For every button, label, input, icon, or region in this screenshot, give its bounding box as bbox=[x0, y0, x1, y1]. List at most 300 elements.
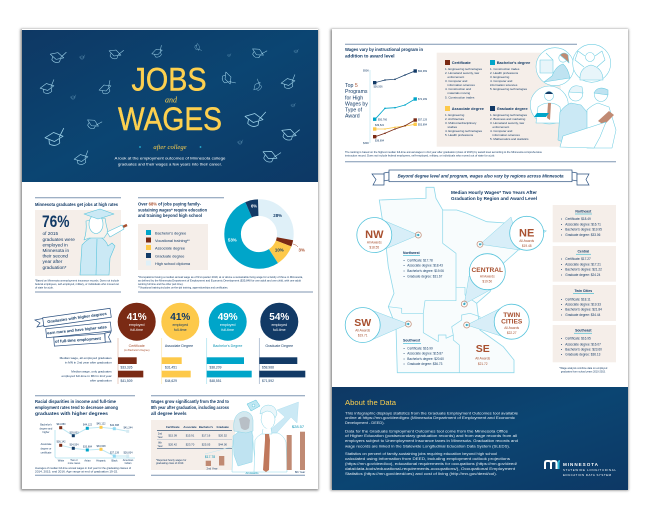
footnote: working full time and the other part time). bbox=[138, 283, 184, 286]
paragraph 1: This infographic displays statistics from the Graduate Employment Outcomes tool available bbox=[345, 410, 518, 415]
list: northwest bbox=[403, 251, 444, 278]
list: northwest: Northwest bbox=[403, 251, 420, 255]
circle stats: employed bbox=[173, 323, 188, 327]
legend: High school diploma bbox=[155, 261, 191, 266]
line chart: Associate bbox=[41, 443, 52, 446]
region: southwest: $19.71 bbox=[358, 334, 368, 338]
panel: central values: Central bbox=[577, 250, 589, 254]
line chart: more races bbox=[68, 462, 81, 465]
decorative graduation caps bbox=[39, 43, 300, 166]
region: central bbox=[461, 254, 505, 307]
region: southwest: All Awards bbox=[355, 328, 371, 332]
region: southeast bbox=[475, 343, 491, 366]
panel: twin cities values: • bbox=[561, 303, 562, 307]
region: southeast: $21.72 bbox=[478, 362, 488, 366]
panel: northeast values: Northeast bbox=[575, 209, 592, 213]
list: southwest: • bbox=[404, 352, 405, 356]
footnote: instruction record. Does not include federal employees, self-employed, military, or individuals who moved out of state for a job. bbox=[345, 154, 495, 158]
footnote: The ranking is based on the highest median full-time annual wages in 2nd year after graduation (class of 2015) by award level according to the Minnesota comprehensive bbox=[345, 151, 543, 154]
heading: and training beyond high school bbox=[138, 213, 202, 218]
list: associate: 4. Engineering technologies bbox=[445, 129, 483, 133]
region: northwest: NW bbox=[365, 229, 384, 241]
list: southwest bbox=[403, 339, 444, 366]
line chart: top programs: $30K bbox=[363, 142, 369, 145]
panel: higher degrees earn more bbox=[35, 303, 305, 384]
map of Minnesota bbox=[345, 187, 546, 373]
region: central: CENTRAL bbox=[472, 267, 503, 274]
stat text: of 2015 bbox=[42, 231, 59, 236]
list: bachelor: Bachelor's degree bbox=[497, 60, 531, 65]
panel: family-sustaining jobs bbox=[138, 198, 313, 292]
illustration: workers bbox=[530, 44, 616, 148]
table: $25.05 bbox=[202, 442, 211, 446]
donut chart: 10% bbox=[275, 248, 284, 252]
panel: northeast values: • bbox=[561, 228, 562, 232]
list: graduate: 5. Mathematics and statistics bbox=[490, 137, 529, 141]
panel: central values: • bbox=[561, 273, 562, 277]
illustration: two graduates bbox=[232, 405, 287, 472]
panel: northeast values: • bbox=[561, 217, 562, 221]
line chart: top programs: $90K bbox=[363, 70, 369, 72]
list: northwest: Associate degree: $18.43 bbox=[407, 264, 443, 268]
panel: southeast values: • bbox=[561, 348, 562, 352]
stat text: graduates were bbox=[42, 237, 75, 242]
footnote bbox=[138, 276, 303, 290]
list: associate: 5. Health professions bbox=[445, 133, 474, 137]
list: bachelor: 2. Health professions bbox=[490, 71, 519, 75]
list: bachelor: 3. Engineering bbox=[490, 75, 510, 79]
small bars 2nd year: 2nd Year bbox=[206, 466, 218, 470]
large bars 8th year: 8th Year bbox=[295, 470, 305, 474]
line chart: White bbox=[58, 460, 65, 462]
line chart bbox=[40, 422, 135, 465]
map footnote: *Wage analysis combine data on employed bbox=[559, 367, 608, 370]
table: *Reported hourly wages for bbox=[156, 459, 186, 462]
list: certificate: 1. Engineering technologies bbox=[445, 67, 483, 71]
large bars 8th year bbox=[245, 424, 305, 475]
panel: high rates bbox=[35, 198, 127, 292]
panel: twin cities values: Associate degree: $19.33 bbox=[565, 303, 601, 307]
circle stats: full-time bbox=[130, 328, 143, 332]
list: southwest: Certificate: $16.99 bbox=[407, 347, 433, 351]
circle stats: full-time bbox=[174, 328, 187, 332]
bar chart: Graduate Degree bbox=[265, 344, 293, 348]
table: $23.70 bbox=[186, 442, 195, 446]
list: bachelor: 1. Construction trades bbox=[490, 67, 520, 71]
subtitle: after college bbox=[153, 144, 187, 151]
region: northeast: NE bbox=[519, 228, 534, 240]
line chart: Black bbox=[111, 460, 118, 462]
list: certificate: 4. Construction and bbox=[445, 87, 471, 91]
row labels: in MN in 2nd year after graduation bbox=[65, 360, 112, 364]
list: southwest: • bbox=[404, 347, 405, 351]
donut chart: 28% bbox=[273, 213, 282, 218]
title: and bbox=[165, 96, 178, 105]
region: southwest: SW bbox=[354, 317, 371, 329]
donut chart bbox=[228, 204, 305, 260]
heading bbox=[138, 202, 207, 218]
panel: central values: Bachelor's degree: $21.22 bbox=[565, 268, 602, 272]
list: northwest: • bbox=[404, 264, 405, 268]
list: northwest: • bbox=[404, 274, 405, 278]
line chart: $36,142 bbox=[56, 440, 66, 444]
region: twin cities: All Awards bbox=[504, 326, 520, 330]
paragraph 3: calculated using information from DEED, including employment outlook projections bbox=[345, 456, 510, 461]
paragraph 2: Data for the Graduate Employment Outcomes tool come from the Minnesota Office bbox=[345, 428, 508, 433]
bar chart: $44,629 bbox=[165, 379, 177, 383]
heading: graduates with higher degrees bbox=[35, 411, 108, 416]
list: bachelor: 4. Computer and bbox=[490, 79, 513, 83]
panel: racial disparities bbox=[35, 396, 135, 475]
heading: sustaining wages* require education bbox=[138, 207, 207, 212]
map title bbox=[451, 190, 537, 201]
line chart: Asian bbox=[84, 460, 91, 462]
line chart: top programs: $72,299 bbox=[418, 98, 428, 101]
circle stats: 41% bbox=[170, 312, 190, 323]
map footnote: graduates from school years 2010-2015. bbox=[561, 370, 606, 373]
panel: southeast values: Graduate degree: $36.13 bbox=[565, 353, 601, 357]
side title: Wages by bbox=[345, 102, 368, 108]
circle stats: 41% bbox=[127, 312, 147, 323]
footnote: federal employees, self-employed, military, or individuals who moved out bbox=[35, 283, 119, 286]
panel: northeast values: Graduate degree: $33.06 bbox=[565, 233, 601, 237]
logo: Minnesota SLEDS bbox=[545, 461, 616, 477]
table: graduating class of 2010. bbox=[156, 462, 184, 465]
region: twin cities: TWIN bbox=[503, 312, 520, 319]
line chart: $26,834 bbox=[123, 452, 133, 454]
region: southwest bbox=[345, 308, 411, 342]
bar chart bbox=[118, 338, 305, 384]
bar chart: (no Bachelor's Degree) bbox=[124, 349, 150, 352]
footnote: *Occupations having a median annual wage as of first quarter 2019, at or above a sustainable living wage for a family of three in Minnesota, bbox=[138, 276, 303, 279]
heading: 8th year after graduation, including across bbox=[151, 405, 229, 410]
region: northeast: $19.48 bbox=[522, 244, 532, 248]
table: 2nd bbox=[158, 432, 163, 436]
paragraph 2 bbox=[345, 428, 518, 448]
panel: central values: • bbox=[561, 262, 562, 266]
paragraph 3: Statistics (https://mn.gov/deed/oes) and cost of living (http://mn.gov/deed/col). bbox=[345, 471, 497, 476]
panel: northeast values: Bachelor's degree: $19.95 bbox=[565, 228, 602, 232]
line chart: top programs: $90,969 bbox=[418, 70, 428, 73]
ribbon heading bbox=[35, 308, 111, 346]
heading bbox=[35, 399, 118, 416]
panel: southeast values: • bbox=[561, 342, 562, 346]
donut chart: 3% bbox=[299, 248, 305, 252]
heading: Minnesota graduates get jobs at high rates bbox=[35, 202, 118, 207]
panel: southeast values: Certificate: $16.95 bbox=[565, 336, 591, 340]
small bars 2nd year: $17.78 bbox=[205, 455, 215, 459]
list: associate: studies bbox=[448, 125, 458, 129]
footer: about the data bbox=[332, 387, 628, 490]
bar chart: $38,209 bbox=[210, 366, 222, 370]
heading: Wages vary by instructional program in bbox=[345, 47, 423, 52]
line chart: $33,884 bbox=[83, 446, 93, 448]
logo: Minnesota SLEDS: MINNESOTA bbox=[563, 462, 599, 467]
region: twin cities bbox=[464, 304, 529, 339]
region: southeast: All Awards bbox=[475, 356, 491, 360]
list: certificate: 3. Computer and bbox=[445, 79, 468, 83]
legend: Bachelor's degree bbox=[155, 230, 186, 235]
line chart: Indian bbox=[125, 462, 132, 465]
panel: twin cities values: Twin Cities bbox=[574, 289, 592, 293]
map title: Median Hourly Wages* Two Years After bbox=[451, 190, 537, 195]
line chart: $27,139 bbox=[110, 452, 120, 454]
panel: wages by program bbox=[345, 44, 616, 162]
icon: money bbox=[247, 400, 260, 411]
region: southeast: SE bbox=[476, 343, 490, 355]
line chart: $39,853 bbox=[69, 432, 79, 434]
line chart: top programs bbox=[363, 69, 428, 145]
donut chart: 6% bbox=[251, 204, 257, 208]
circle stats: full-time bbox=[273, 328, 286, 332]
list: certificate: 2. Homeland security, law bbox=[445, 71, 480, 75]
panel: twin cities values: • bbox=[561, 297, 562, 301]
line chart: $44,122 bbox=[83, 424, 93, 426]
panel: twin cities values: • bbox=[561, 308, 562, 312]
panel: southeast values: Southeast bbox=[575, 328, 592, 332]
row labels: employed full-time in MN in 2nd year bbox=[61, 374, 112, 378]
legend: Vocational training** bbox=[155, 238, 190, 243]
region: central: All Awards bbox=[480, 274, 495, 278]
stat text: graduation* bbox=[42, 265, 67, 270]
table: $20.42 bbox=[168, 442, 177, 446]
panel: twin cities values: Bachelor's degree: $21.84 bbox=[565, 308, 602, 312]
region: northeast: All Awards bbox=[519, 239, 535, 243]
banner: regions heading bbox=[372, 170, 589, 185]
table: Associate bbox=[183, 425, 197, 429]
panel: northeast values: • bbox=[561, 233, 562, 237]
icon: graduate bbox=[80, 209, 127, 275]
list: southwest: Bachelor's degree: $20.60 bbox=[407, 357, 444, 361]
heading bbox=[345, 47, 423, 58]
bar chart: $58,988 bbox=[262, 366, 274, 370]
intro text bbox=[114, 156, 226, 166]
table: Certificate bbox=[166, 425, 180, 429]
list: northwest: • bbox=[404, 259, 405, 263]
list: southwest: Southwest bbox=[403, 339, 421, 343]
paragraph 3: (https://mn.gov/deed/oo), educational requirements for occupations (https://mn.gov/deed/ bbox=[345, 461, 518, 466]
panel: southeast values: Associate degree: $16.07 bbox=[565, 342, 601, 346]
side title: Programs bbox=[345, 89, 368, 95]
heading: Wages grow significantly from the 2nd to bbox=[151, 399, 229, 404]
stat text: employed in bbox=[42, 242, 68, 248]
paragraph 3 bbox=[345, 451, 518, 476]
list: certificate: enforcement bbox=[448, 75, 464, 79]
paragraph 1 bbox=[345, 410, 518, 425]
footnote: 2014, 2015, and 2016. Age range at end of graduation 19-32. bbox=[35, 470, 118, 473]
line chart: degree and bbox=[40, 427, 53, 430]
line chart: Two or bbox=[70, 459, 78, 462]
list: certificate: Certificate bbox=[452, 60, 472, 65]
panel: twin cities values bbox=[553, 285, 616, 321]
line chart: $33,608 bbox=[96, 445, 106, 448]
panel: southeast values: Bachelor's degree: $23.60 bbox=[565, 348, 602, 352]
footnote bbox=[345, 151, 543, 158]
logo: Minnesota SLEDS: EDUCATION DATA SYSTEM bbox=[563, 473, 612, 477]
legend bbox=[138, 224, 208, 270]
side title: Type of bbox=[345, 108, 363, 114]
line chart: $44,880 bbox=[56, 423, 66, 426]
panel: northeast values: Associate degree: $16.71 bbox=[565, 222, 601, 226]
panel: central values: • bbox=[561, 257, 562, 261]
bar chart: Associate Degree bbox=[165, 344, 193, 348]
list: southwest: Graduate degree: $36.73 bbox=[407, 362, 443, 366]
bar chart: $33,326 bbox=[120, 366, 133, 370]
list: certificate bbox=[445, 60, 483, 100]
large bars 8th year: All Awards bbox=[245, 471, 259, 475]
paragraph 2: wage records are linked in the Statewide Longitudinal Education Data System (SLEDS). bbox=[345, 443, 510, 448]
panel: northeast values: • bbox=[561, 222, 562, 226]
line chart: Hispanic bbox=[96, 460, 107, 462]
region: northwest bbox=[357, 218, 421, 252]
line chart: $34,554 bbox=[69, 444, 79, 446]
bar chart: Certificate bbox=[129, 344, 145, 348]
footnote: Averages of median full-time annual wages in 2nd year for the graduating classes of bbox=[35, 467, 131, 470]
table bbox=[156, 425, 232, 465]
line chart: $41,244 bbox=[123, 426, 133, 430]
side title: Top 5 bbox=[345, 83, 358, 89]
list: associate: 2. Architecture bbox=[445, 117, 465, 121]
line chart: top programs: $56,506 bbox=[374, 86, 383, 88]
circle stats: employed bbox=[272, 323, 287, 327]
stat text: Minnesota in bbox=[42, 248, 69, 253]
list: southwest: • bbox=[404, 357, 405, 361]
list: certificate: 5. Construction trades bbox=[445, 96, 475, 100]
table: Bachelor's bbox=[199, 425, 214, 429]
circle stats: 54% bbox=[269, 312, 289, 323]
bar chart: $31,451 bbox=[165, 366, 177, 370]
heading: all degree levels bbox=[151, 411, 187, 416]
table: Year bbox=[157, 436, 163, 439]
map footnote bbox=[559, 367, 608, 373]
legend: Graduate degree bbox=[155, 253, 184, 258]
row labels: after graduation bbox=[90, 379, 112, 383]
region: northwest: All Awards bbox=[367, 240, 382, 244]
table: $15.91 bbox=[186, 433, 195, 437]
right page bbox=[332, 29, 628, 490]
circle stats: full-time bbox=[221, 328, 234, 332]
line chart: top programs: $57,129 bbox=[418, 118, 428, 122]
list: northwest: Certificate: $17.78 bbox=[407, 259, 433, 263]
table: Year bbox=[157, 445, 163, 448]
panel: central values: Certificate: $17.27 bbox=[565, 257, 591, 261]
panel: twin cities values: Certificate: $18.11 bbox=[565, 297, 591, 301]
list: graduate: Graduate degree bbox=[497, 106, 528, 111]
list: bachelor: 5. Engineering technologies bbox=[490, 87, 528, 91]
panel: central values bbox=[553, 246, 616, 282]
heading: Over 68% of jobs paying family- bbox=[138, 202, 201, 206]
circle stats: employed bbox=[220, 323, 235, 327]
row labels: Median wage, only graduates bbox=[71, 369, 112, 373]
header banner bbox=[22, 30, 318, 182]
list: associate: Associate degree bbox=[452, 106, 485, 111]
line chart: higher bbox=[43, 431, 50, 434]
paragraph 1: Development - DEED). bbox=[345, 420, 385, 425]
table: $17.16 bbox=[202, 433, 211, 437]
line chart: top programs: $39,522 bbox=[375, 124, 385, 127]
stat text bbox=[42, 213, 75, 270]
region: twin cities: CITIES bbox=[501, 318, 523, 326]
footnote: *Based on Minnesota unemployment insurance records. Does not include bbox=[35, 280, 120, 282]
heading: addition to award level bbox=[345, 53, 395, 58]
footnote: as defined by the Minnesota Department of Employment and Economic Development ($35,848 for one adult and one child, with one adult bbox=[138, 280, 301, 282]
line chart: top programs: $36,694 bbox=[375, 140, 385, 142]
title bbox=[118, 62, 222, 137]
panel: twin cities values: • bbox=[561, 313, 562, 317]
paragraph 1: online at https://mn.gov/deed/geo (Minnesota Department of Employment and Economic bbox=[345, 415, 515, 420]
list: northwest: Bachelor's degree: $19.06 bbox=[407, 269, 444, 273]
bar chart: Bachelor's Degree bbox=[213, 344, 242, 348]
list: certificate: materials moving bbox=[448, 91, 471, 95]
donut chart: 53% bbox=[228, 238, 237, 242]
list: southwest: • bbox=[404, 362, 405, 366]
panel: northeast values: Certificate: $18.49 bbox=[565, 217, 591, 221]
panel: program lists bbox=[437, 53, 561, 147]
title: JOBS bbox=[132, 62, 206, 98]
list: graduate: 1. Engineering technologies bbox=[490, 113, 528, 117]
region: northwest: $18.55 bbox=[369, 246, 379, 250]
ribbon heading: Graduates with higher degrees bbox=[47, 311, 108, 324]
line chart: top programs: $50,766 bbox=[378, 118, 388, 122]
table: $20.52 bbox=[218, 433, 227, 437]
bar chart: $71,592 bbox=[262, 379, 274, 383]
left page bbox=[22, 29, 318, 489]
icon: growth arrow bbox=[270, 402, 298, 437]
region: twin cities: $22.27 bbox=[507, 331, 517, 335]
paragraph 3: data/data-tools/educational-requirements-occupations/), Occupational Employment bbox=[345, 466, 516, 471]
heading: Racial disparities in income and full-time bbox=[35, 399, 116, 404]
list: graduate: 2. Business and marketing bbox=[490, 117, 526, 121]
circle stats bbox=[118, 303, 298, 341]
list: associate bbox=[445, 106, 485, 137]
subtitle bbox=[139, 144, 201, 151]
logo: Minnesota SLEDS: STATEWIDE LONGITUDINAL bbox=[563, 468, 616, 472]
list: graduate: information sciences bbox=[492, 133, 520, 137]
heading bbox=[151, 399, 229, 416]
line chart: American bbox=[123, 459, 134, 462]
ribbon heading: earn more and have higher rates bbox=[47, 324, 108, 335]
stat text: year after bbox=[42, 259, 63, 264]
list: graduate: 4. Computer and bbox=[490, 129, 513, 133]
table: Graduate bbox=[217, 425, 229, 429]
paragraph 3: Statistics on percent of family-sustaining jobs requiring education beyond high school bbox=[345, 451, 497, 456]
small bars 2nd year bbox=[205, 446, 235, 470]
list: southwest: Associate degree: $15.87 bbox=[407, 352, 443, 356]
intro text: graduates and their wages a few years into their career. bbox=[118, 162, 222, 166]
panel: northeast values bbox=[553, 205, 616, 242]
footnote: of state for a job. bbox=[35, 286, 54, 290]
row labels: Median wage, all employed graduates bbox=[60, 356, 112, 360]
list: bachelor bbox=[490, 60, 531, 91]
banner: regions heading: Beyond degree level and program, wages also vary by regions across Minnesota bbox=[398, 174, 564, 178]
ribbon heading: of full-time employment bbox=[55, 336, 102, 344]
bar chart: $48,551 bbox=[210, 379, 222, 383]
list: northwest: Graduate degree: $31.67 bbox=[407, 274, 443, 278]
heading: About the Data bbox=[345, 400, 396, 407]
title: WAGES bbox=[118, 101, 222, 137]
panel: southeast values: • bbox=[561, 353, 562, 357]
list: bachelor: information sciences bbox=[490, 83, 518, 87]
panel: central values: Graduate degree: $24.24 bbox=[565, 273, 601, 277]
line chart: $45,122 bbox=[96, 422, 106, 426]
paragraph 2: employers subject to Unemployment Insurance taxes in Minnesota. Graduation records and bbox=[345, 438, 518, 443]
list: associate: 3. Multi-interdisciplinary bbox=[445, 121, 477, 125]
line chart: $42,388 bbox=[110, 424, 120, 427]
list: northwest: • bbox=[404, 269, 405, 273]
footnote: **Vocational training includes on-the-job training, apprenticeships and certificates. bbox=[138, 286, 228, 290]
panel: southeast values: • bbox=[561, 336, 562, 340]
line chart: certificate bbox=[41, 451, 52, 454]
